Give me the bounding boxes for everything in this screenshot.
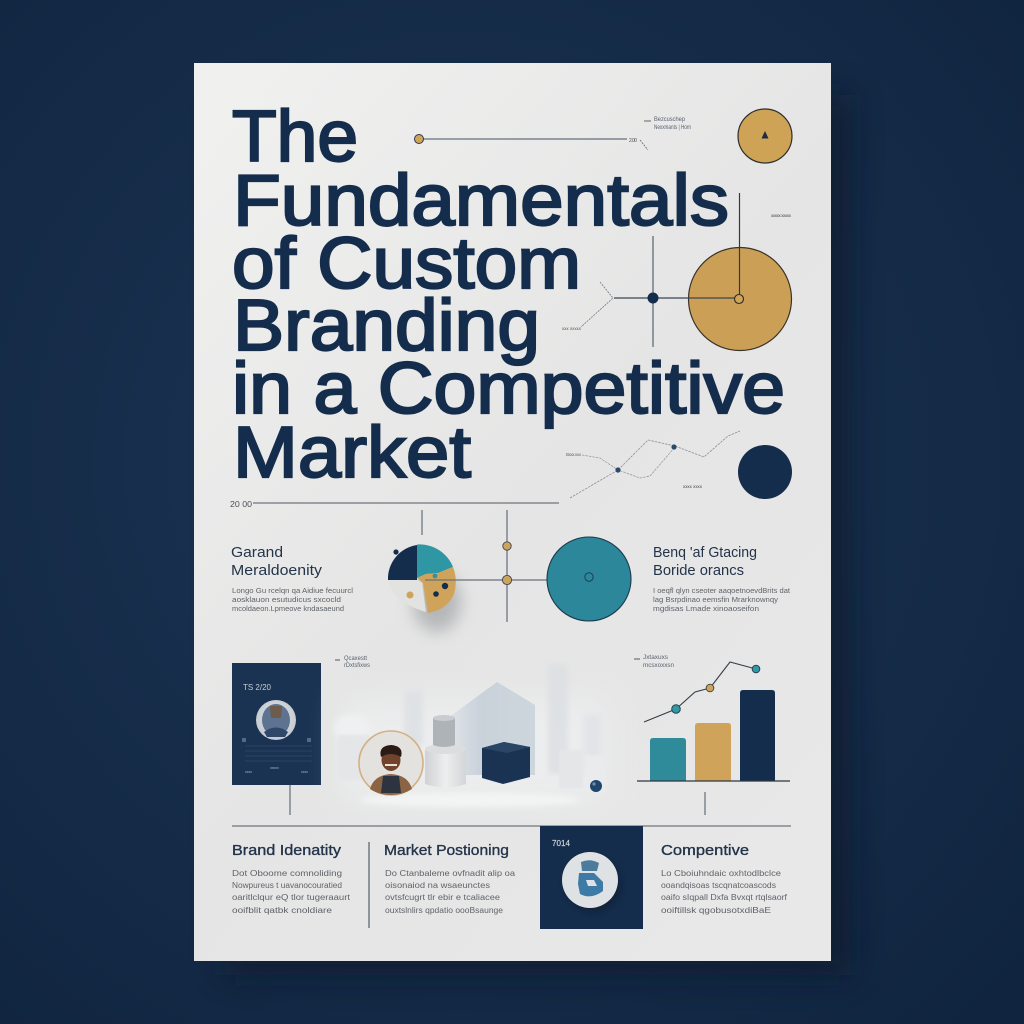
top timeline: 2.00: [629, 138, 637, 144]
column: competitive: oaifo sIqpall Dxfa Bvxqt rtqlsaorf: [661, 893, 788, 902]
column: competitive: ooiftillsk qgobusotxdiBaE: [661, 906, 771, 915]
connector diagram with large gold circle: xxx xxxxx: [562, 326, 582, 331]
icon: navy circle: [738, 445, 792, 499]
poster shadow: [225, 95, 850, 975]
icon: teal circle: [547, 537, 631, 621]
text block: right feature: lag Bsrpdinao eemsfin Mrarknownqy: [653, 597, 779, 604]
icon: gold circle with marker: [738, 109, 792, 163]
brand card: navy: xxxx: [301, 770, 308, 774]
text block: right feature: mgdisas Lmade xinoaoseifon: [653, 606, 759, 613]
text block: right feature: I oeqfl qlyn cseoter aaqoetnoevdBrits dat: [653, 588, 790, 595]
small label: middle right: Jxtaxuxs: [643, 655, 668, 661]
text block: left feature: [231, 544, 353, 613]
pie chart: [388, 544, 461, 632]
connector diagram with large gold circle: xxxxx xxxxx: [771, 213, 792, 218]
title divider with date: 20 00: [230, 500, 253, 509]
dashed line chart: Bxxx xxx: [566, 452, 582, 457]
bottom divider: [232, 825, 791, 827]
connector under card: [289, 785, 291, 815]
title: Fundamentals: [233, 161, 729, 241]
column: brand identity: Brand Idenatity: [232, 842, 342, 859]
top small label: [644, 116, 691, 131]
text block: left feature: mcoldaeon.Lpmeove kndasaeund: [232, 606, 344, 613]
text block: left feature: Garand: [231, 544, 283, 561]
column: competitive: ooandqisoas tscqnatcoascods: [661, 881, 776, 890]
top timeline: [414, 134, 648, 150]
top small label: Bezcuschep: [654, 116, 685, 123]
connector diagram with large gold circle: [562, 193, 792, 350]
column: market positioning: Do Ctanbaleme ovfnadit alip oa: [385, 869, 516, 878]
small label: middle left: rDxtsfixws: [344, 663, 370, 669]
text block: left feature: Longo Gu rcelqn qa Aidiue fecuurcl: [232, 588, 353, 595]
navy badge card: 7014: [552, 839, 571, 848]
column: brand identity: Nowpureus t uavanocouratied: [232, 881, 342, 890]
column: brand identity: oaritlclqur eQ tlor tugeraaurt: [232, 893, 351, 902]
title: of Custom: [232, 224, 581, 304]
column: market positioning: ouxtslnlirs qpdatio oooBsaunge: [385, 906, 504, 915]
small label: middle left: Qcaxestt: [344, 656, 367, 662]
dashed line chart: [566, 431, 740, 498]
title: The: [232, 97, 358, 177]
product scene: [334, 664, 605, 807]
small label: middle right: mcsxoxxsn: [643, 663, 674, 669]
navy badge card: [540, 826, 643, 929]
column: brand identity: ooifblit qatbk cnoldiare: [232, 906, 333, 915]
title: in a Competitive: [232, 349, 785, 429]
column: competitive: Lo Cboiuhndaic oxhtodlbclce: [661, 869, 782, 878]
small label: middle left: [335, 656, 370, 669]
column: market positioning: oisonaiod na wsaeunctes: [385, 881, 490, 890]
connector under chart: [704, 792, 706, 815]
text block: left feature: aosklauon esutudicus sxcocld: [232, 597, 341, 604]
brand card: navy: TS 2/20: [243, 682, 271, 692]
poster sheet: [194, 63, 831, 961]
column: market positioning: [384, 842, 516, 915]
text block: right feature: Boride orancs: [653, 562, 744, 579]
title: [232, 97, 785, 493]
bar and line chart: [637, 662, 790, 781]
text block: right feature: Benq 'af Gtacing: [653, 544, 757, 561]
brand card: navy: xxxx: [245, 770, 252, 774]
small label: middle right: [634, 655, 674, 669]
title: Branding: [233, 286, 540, 366]
top small label: Nexxmants | Horn: [654, 125, 691, 131]
column divider: [368, 842, 370, 928]
text block: right feature: [653, 544, 790, 613]
dashed line chart: xxxx xxxx: [683, 484, 703, 489]
connector lines to teal circle: [422, 510, 548, 622]
column: market positioning: ovtsfcugrt tlr ebir e tcaliacee: [385, 893, 501, 902]
brand card: navy: xxxxx: [270, 766, 279, 770]
column: brand identity: Dot Oboome comnoliding: [232, 869, 342, 878]
text block: left feature: Meraldoenity: [231, 562, 323, 579]
column: brand identity: [232, 842, 351, 915]
icon: portrait medallion: [359, 731, 423, 795]
brand card: navy: [232, 663, 321, 785]
column: competitive: Compentive: [661, 842, 749, 859]
title: Market: [233, 413, 471, 493]
column: market positioning: Market Postioning: [384, 842, 509, 859]
column: competitive: [661, 842, 788, 915]
